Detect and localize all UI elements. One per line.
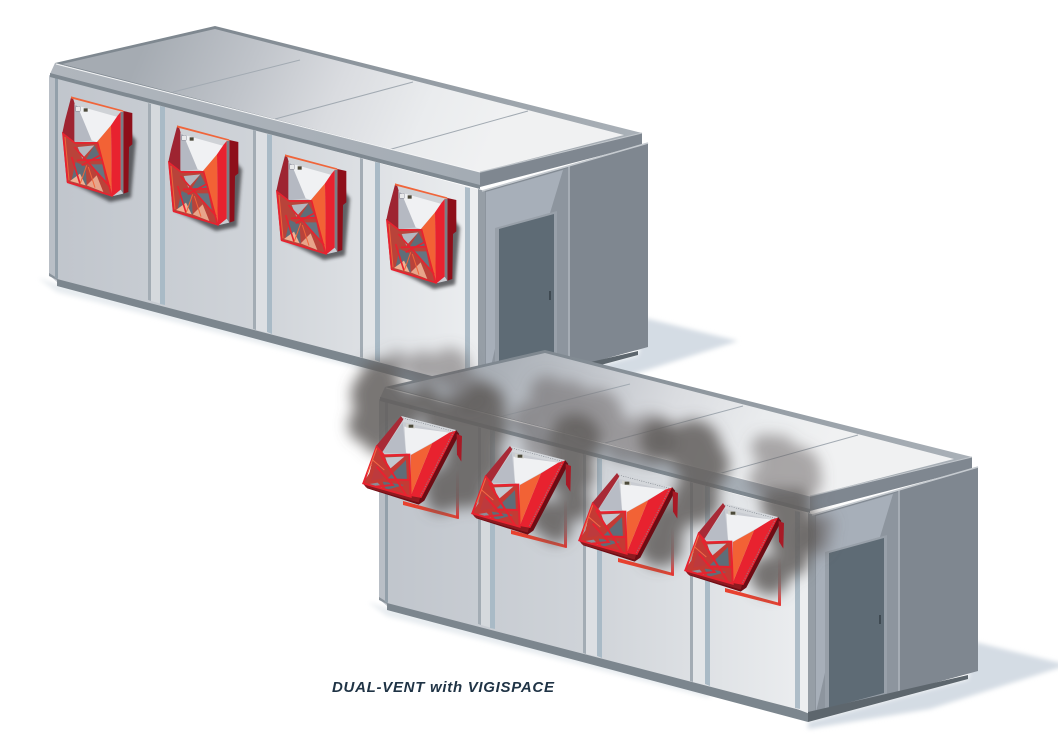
vent closed 1 — [62, 96, 136, 202]
vent closed 3 — [276, 154, 350, 260]
open vents row — [363, 416, 784, 592]
vent open 4 — [685, 503, 784, 592]
vent open 2 — [472, 446, 571, 535]
vent open 3 — [579, 473, 678, 562]
vent open 1 — [363, 416, 462, 505]
smoke cloud — [348, 348, 834, 595]
window frames behind open vents — [403, 470, 781, 606]
closed vents row — [62, 96, 460, 289]
building: closed DUAL-VENT unit — [38, 26, 738, 405]
caption: DUAL-VENT with VIGISPACE — [332, 679, 555, 696]
vent closed 4 — [386, 183, 460, 289]
vent closed 2 — [168, 125, 242, 231]
building: vented DUAL-VENT unit — [368, 350, 1058, 729]
